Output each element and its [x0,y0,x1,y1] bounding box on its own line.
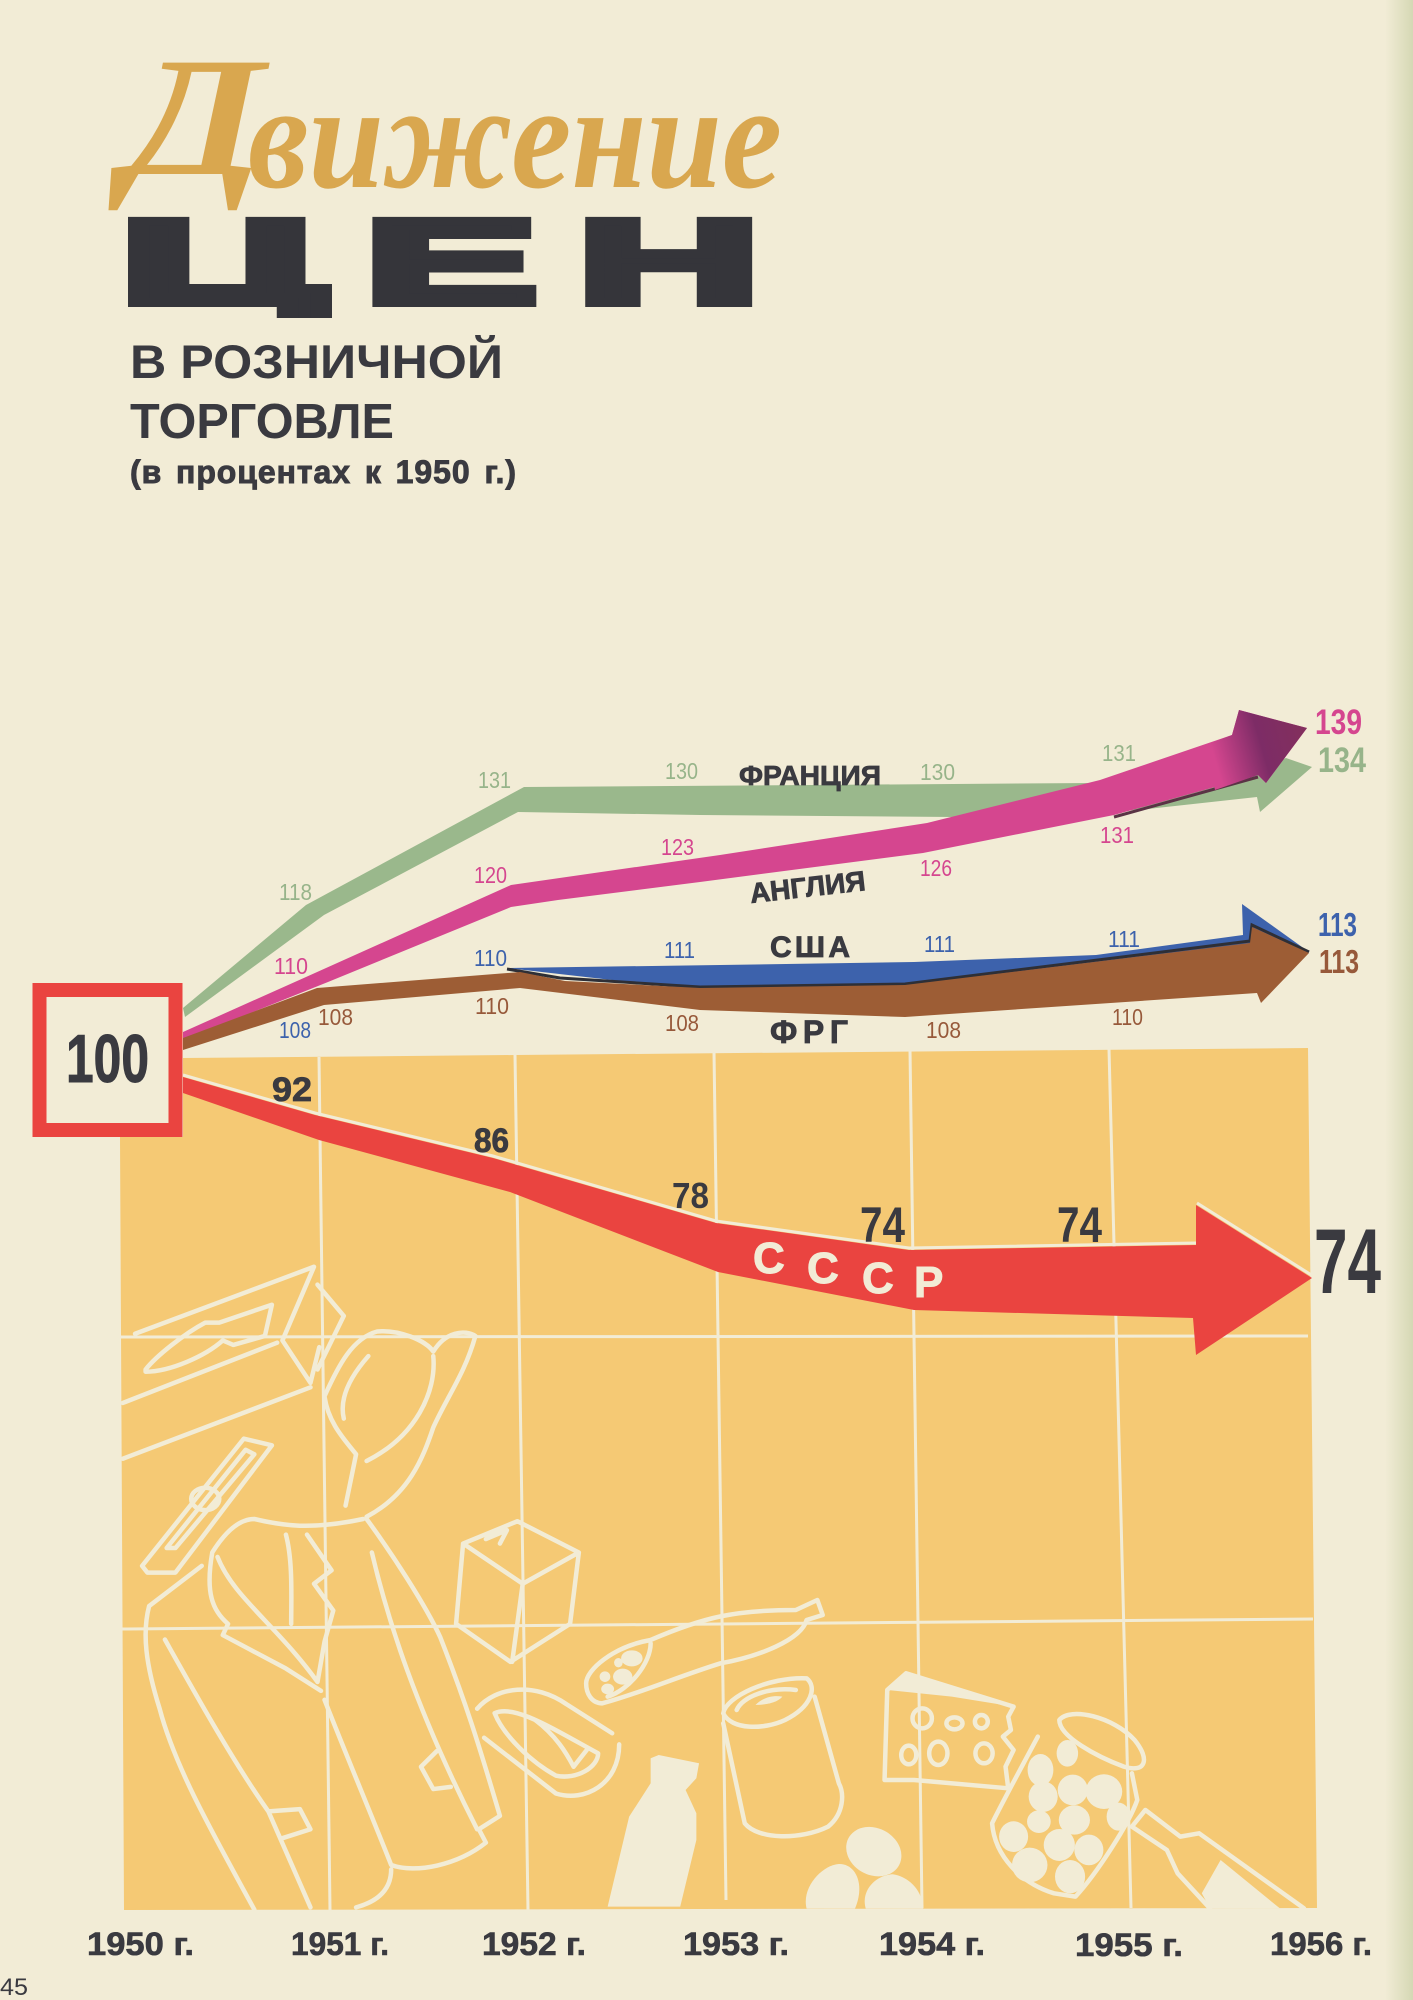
series labels: США values: 111 [664,937,695,963]
country labels: США [770,931,850,964]
subtitle: ТОРГОВЛЕ [130,395,394,449]
subtitle: (в процентах к 1950 г.) [130,454,516,490]
series labels: ФРГ values: 108 [318,1004,353,1030]
x axis: years: 1950 г. [87,1926,194,1962]
arrow: Англия (pink) [183,710,1307,1040]
arrow: ФРГ (brown) [183,925,1309,1050]
label: СССР: СССР [753,1234,943,1307]
series labels: Англия values: 126 [920,855,952,881]
USSR values: 86 [474,1122,509,1160]
x axis: years: 1954 г. [879,1926,985,1962]
series labels: Англия values: 110 [274,953,308,979]
icon: milk bottle [608,1755,699,1907]
series labels: США values: 108 [279,1017,311,1043]
title: heavy word ЦЕН: Е [365,196,537,328]
title: heavy word ЦЕН [128,216,752,318]
USSR values: 92 [272,1071,312,1109]
arrow: США (blue) [507,904,1309,990]
icon: tin can [723,1678,842,1836]
country labels: АНГЛИЯ [748,865,867,909]
icon: long loaves of bread [146,1519,500,1910]
icon: butter dish [477,1690,619,1796]
series labels: Англия values: 131 [1100,822,1134,848]
x axis: years: 1951 г. [291,1926,389,1962]
USSR values: 74 [1057,1197,1102,1253]
food illustration: left group [123,1267,619,1910]
series labels: Англия values: 139 [1315,703,1362,742]
USSR values: 78 [672,1175,709,1216]
series labels: Франция values: 131 [1102,740,1136,766]
series labels: США values [279,906,1357,1043]
series labels: США values: 113 [1318,906,1357,943]
x axis: years: 1953 г. [683,1926,789,1962]
arrow: Франция (green) [183,758,1312,1017]
x axis: years: 1952 г. [482,1926,586,1962]
arrow: СССР (red) [183,1075,1313,1355]
x axis: years: 1955 г. [1075,1927,1183,1963]
x axis: years: 1956 г. [1270,1926,1372,1962]
series labels: ФРГ values: 108 [665,1010,699,1036]
title: script word [108,23,782,220]
title: heavy word ЦЕН: Н [578,196,760,328]
country labels: ФРАНЦИЯ [739,760,881,791]
series labels: Англия values [274,703,1362,979]
series labels: Франция values: 134 [1318,741,1366,780]
series labels: Франция values: 118 [279,879,312,905]
food illustration: right group [586,1600,1304,1909]
series labels: ФРГ values: 113 [1319,943,1359,980]
series labels: США values: 111 [1108,926,1140,952]
series labels: Франция values: 130 [665,758,698,784]
series labels: США values: 110 [474,945,507,971]
USSR values: 74 [860,1197,905,1253]
series labels: Франция values: 131 [478,767,511,793]
series labels: Англия values: 120 [474,862,507,888]
x axis: years [87,1926,1372,1963]
panel: orange background with grid [120,1048,1317,1910]
icon: fish on a plate [123,1267,344,1459]
title: heavy word ЦЕН: Ц [120,196,323,328]
USSR values [272,1071,1381,1313]
base value box [40,990,176,1130]
series labels: США values: 111 [924,931,955,957]
icon: eggs [806,1824,923,1909]
subtitle [130,335,516,490]
icon: cheese wedge [885,1673,1014,1788]
series labels: ФРГ values [318,943,1359,1043]
series labels: Англия values: 123 [661,834,694,860]
icon: sugar cube [456,1521,579,1662]
icon: round loaf [325,1331,475,1517]
icon: bottle on its side [1132,1810,1304,1908]
series labels: ФРГ values: 108 [926,1017,961,1043]
series labels: Франция values [279,740,1366,905]
icon: jar of pickled fruit [992,1714,1144,1897]
country labels [739,760,881,1050]
subtitle: В РОЗНИЧНОЙ [130,335,503,388]
title: script word: Д [108,23,270,211]
icon: wrapped bar [142,1439,272,1573]
series labels: ФРГ values: 110 [1112,1004,1143,1030]
title: script word: вижение [248,54,782,220]
number: 100: 100 [66,1021,149,1097]
title block [108,23,782,490]
country labels: ФРГ [770,1014,848,1050]
series labels: Франция values: 130 [920,759,955,785]
icon: sausage [586,1600,823,1703]
series labels: ФРГ values: 110 [475,993,509,1019]
